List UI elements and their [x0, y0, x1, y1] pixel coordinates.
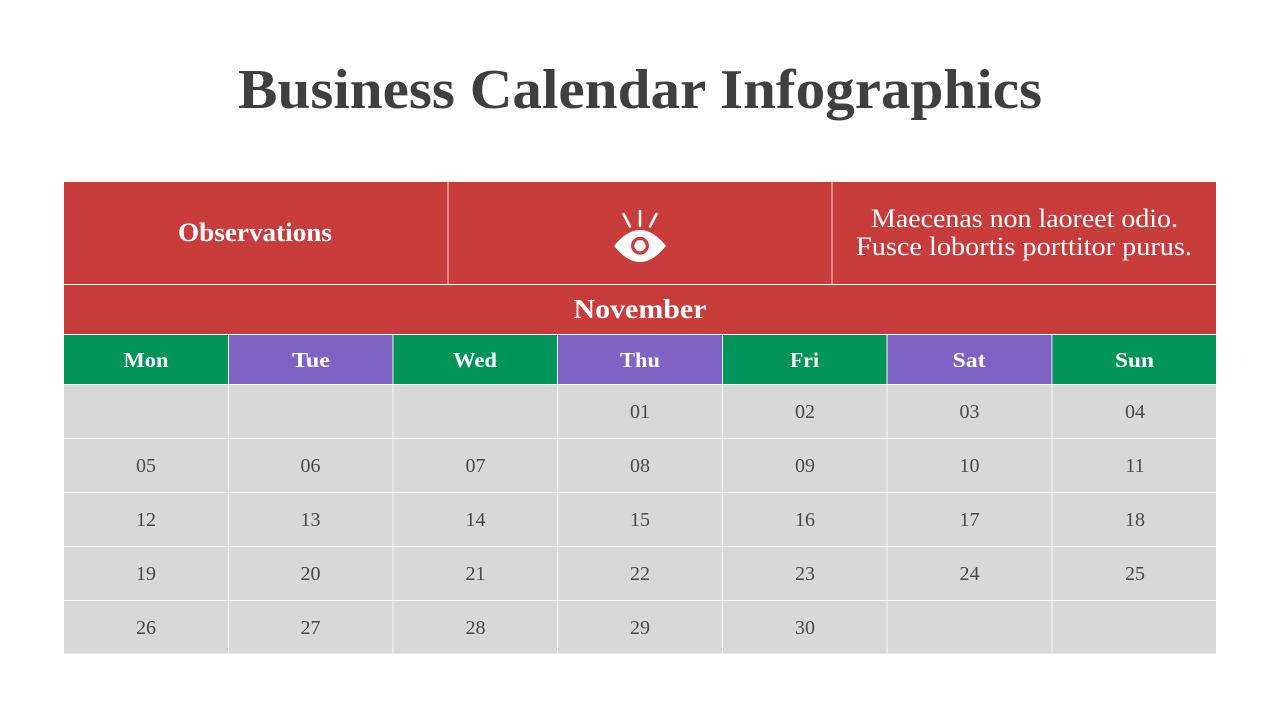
- panel: weekday headers: Sat: [952, 348, 986, 372]
- dates: week 4: 20: [300, 563, 320, 585]
- dates: week 5: [136, 617, 815, 639]
- dates: week 4: 22: [630, 563, 650, 585]
- dates: week 2: 05: [136, 455, 156, 477]
- dates: week 2: 11: [1125, 455, 1145, 477]
- dates: week 5: 28: [466, 617, 486, 639]
- dates: week 3: 14: [466, 509, 486, 531]
- panel: weekday headers: Tue: [292, 348, 330, 372]
- dates: week 3: 12: [136, 509, 156, 531]
- dates: week 4: 23: [795, 563, 815, 585]
- dates: week 3: 15: [630, 509, 650, 531]
- panel: weekday headers: Mon: [124, 348, 169, 372]
- dates: week 1: 04: [1125, 401, 1145, 423]
- text block: description: [856, 204, 1192, 261]
- panel: month banner: [64, 285, 1216, 334]
- text block: description: Fusce lobortis porttitor purus.: [856, 232, 1192, 261]
- dates: week 5: 29: [630, 617, 650, 639]
- dates: week 2: 09: [795, 455, 815, 477]
- panel: weekday headers: Sun: [1115, 348, 1154, 372]
- dates: week 2: 08: [630, 455, 650, 477]
- dates: week 4: 19: [136, 563, 156, 585]
- dates: week 5: 27: [300, 617, 320, 639]
- dates: week 3: 13: [300, 509, 320, 531]
- dates: week 2: 10: [960, 455, 980, 477]
- dates: week 2: 07: [466, 455, 486, 477]
- dates: week 3: [136, 509, 1145, 531]
- panel: weekday headers: Wed: [453, 348, 497, 372]
- dates: week 4: [136, 563, 1145, 585]
- title: Business Calendar Infographics: [238, 59, 1042, 121]
- dates: week 4: 25: [1125, 563, 1145, 585]
- dates: week 3: 18: [1125, 509, 1145, 531]
- dates: week 1: 01: [630, 401, 650, 423]
- dates: week 5: 26: [136, 617, 156, 639]
- panel: observations header row: [64, 182, 1216, 284]
- dates: week 1: [630, 401, 1145, 423]
- dates: week 4: 21: [466, 563, 486, 585]
- dates: week 2: 06: [300, 455, 320, 477]
- heading: observations: Observations: [178, 218, 332, 247]
- dates: week 3: 17: [960, 509, 980, 531]
- dates: week 3: 16: [795, 509, 815, 531]
- text block: description: Maecenas non laoreet odio.: [871, 204, 1178, 233]
- dates: week 4: 24: [960, 563, 980, 585]
- heading: November: November: [574, 294, 707, 324]
- panel: weekday headers: Fri: [790, 348, 819, 372]
- dates: week 1: 03: [960, 401, 980, 423]
- dates: week 1: 02: [795, 401, 815, 423]
- dates: week 2: [136, 455, 1145, 477]
- dates: week 5: 30: [795, 617, 815, 639]
- panel: calendar table: [64, 182, 1216, 654]
- panel: date grid: [64, 335, 1216, 654]
- icon: eye: [614, 211, 666, 262]
- panel: weekday headers: [64, 335, 1216, 384]
- panel: weekday headers: Thu: [620, 348, 660, 372]
